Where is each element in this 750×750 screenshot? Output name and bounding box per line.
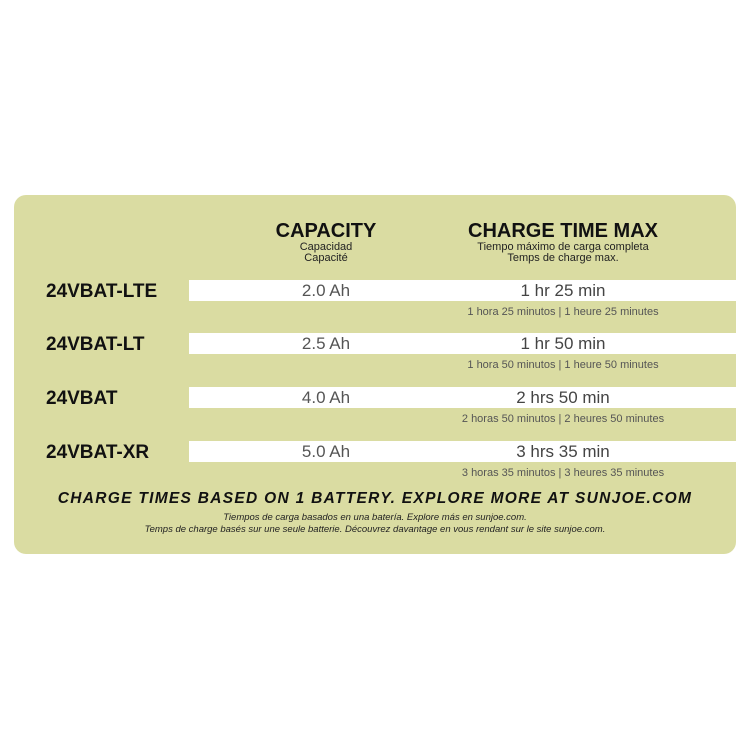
row 2: [46, 333, 736, 371]
row 3: 2 hrs 50 min: [516, 388, 610, 407]
footer note: Temps de charge basés sur une seule batterie. Découvrez davantage en vous rendant sur le site sunjoe.com.: [145, 524, 605, 535]
row 4: 5.0 Ah: [302, 442, 350, 461]
row 3: 4.0 Ah: [302, 388, 350, 407]
row 4: 3 horas 35 minutos | 3 heures 35 minutes: [462, 467, 664, 479]
row 3: 2 horas 50 minutos | 2 heures 50 minutes: [462, 413, 664, 425]
row 1: 24VBAT-LTE: [46, 281, 157, 302]
heading: charge time max: CHARGE TIME MAX: [468, 220, 658, 242]
footer note: CHARGE TIMES BASED ON 1 BATTERY. EXPLORE MORE AT SUNJOE.COM: [58, 490, 692, 507]
row 3: 24VBAT: [46, 388, 117, 409]
footer note: Tiempos de carga basados en una batería. Explore más en sunjoe.com.: [223, 512, 527, 523]
row 4: 3 hrs 35 min: [516, 442, 610, 461]
heading: charge time max: [468, 220, 658, 264]
footer note: [58, 490, 692, 535]
row 3: [46, 387, 736, 425]
heading: capacity: [276, 220, 376, 264]
row 2: 24VBAT-LT: [46, 334, 145, 355]
row 1: 2.0 Ah: [302, 281, 350, 300]
heading: capacity: Capacité: [304, 252, 348, 264]
heading: capacity: Capacidad: [300, 241, 352, 253]
row 2: 1 hr 50 min: [520, 334, 606, 353]
heading: capacity: CAPACITY: [276, 220, 376, 242]
heading: charge time max: Temps de charge max.: [507, 252, 619, 264]
panel: charge table: [14, 195, 736, 554]
heading: charge time max: Tiempo máximo de carga completa: [477, 241, 649, 253]
row 1: 1 hora 25 minutos | 1 heure 25 minutes: [467, 306, 659, 318]
row 2: 1 hora 50 minutos | 1 heure 50 minutes: [467, 359, 659, 371]
row 1: [46, 280, 736, 318]
row 2: 2.5 Ah: [302, 334, 350, 353]
row 1: 1 hr 25 min: [520, 281, 606, 300]
row 4: [46, 441, 736, 479]
row 4: 24VBAT-XR: [46, 442, 149, 463]
